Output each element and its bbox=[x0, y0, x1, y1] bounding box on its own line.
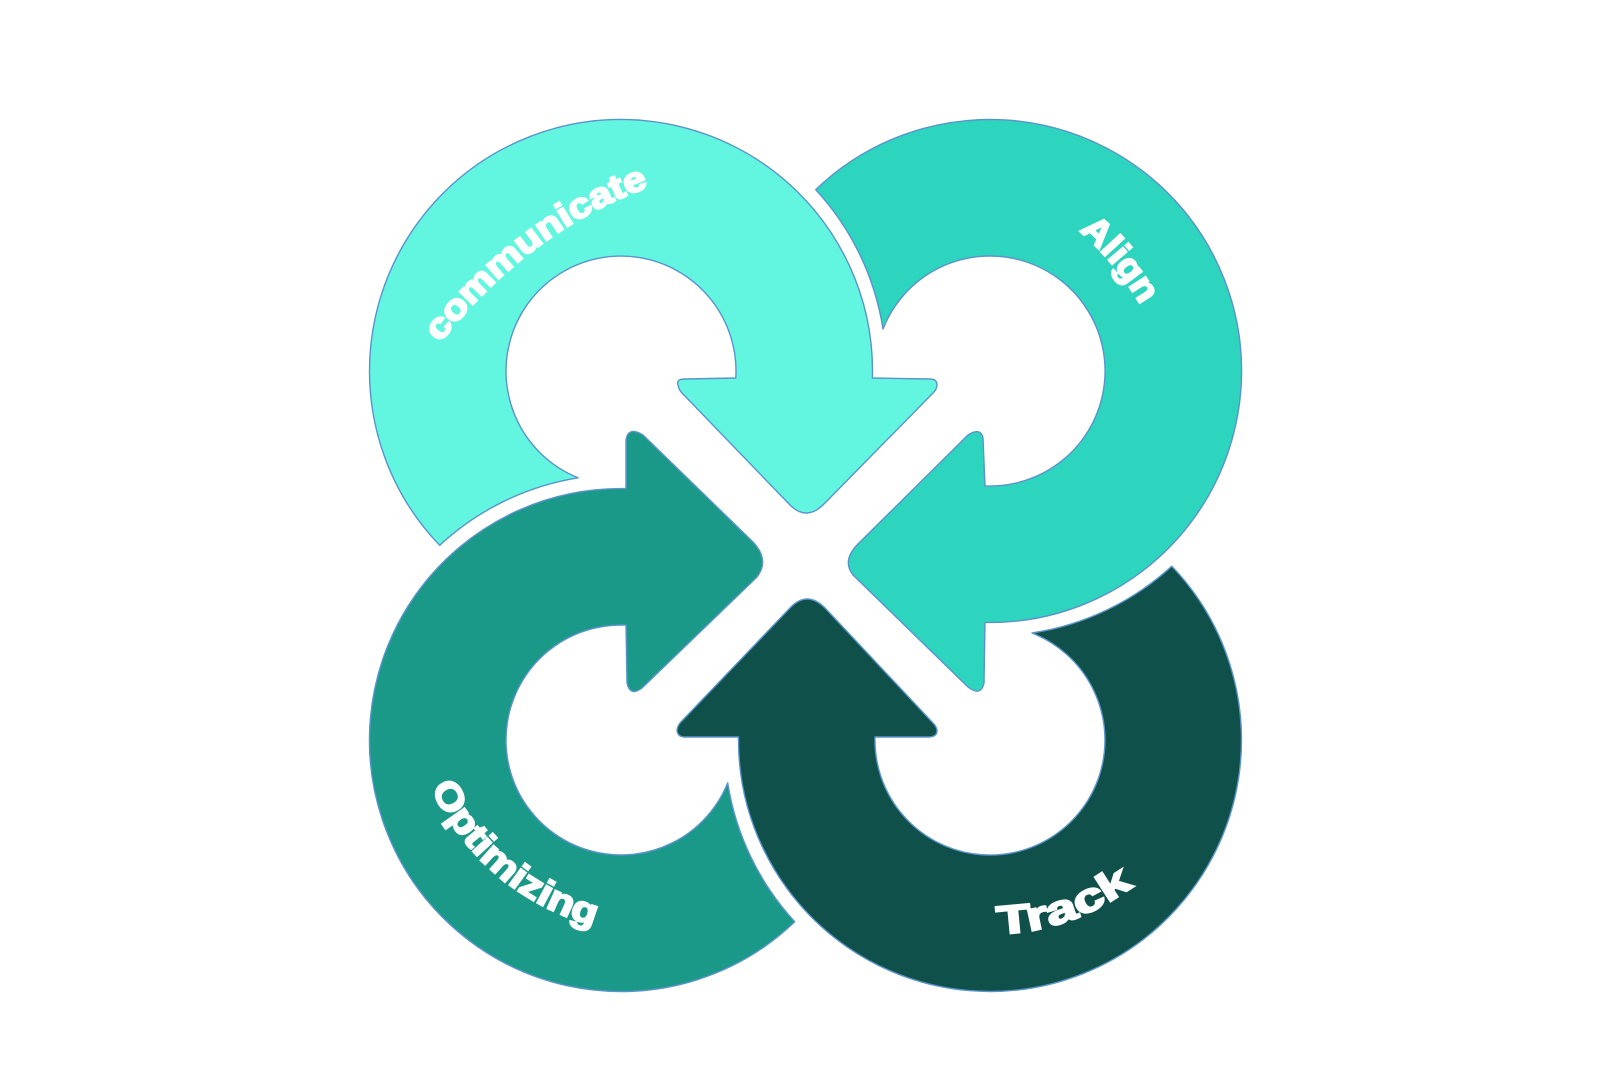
arrow: communicate bbox=[368, 118, 938, 546]
arrow: optimizing bbox=[368, 430, 796, 992]
arrow: track bbox=[676, 566, 1242, 992]
label: track: Track bbox=[994, 866, 1136, 934]
label: optimizing: Optimizing bbox=[434, 780, 598, 932]
arrow: align bbox=[815, 118, 1242, 692]
label: align: Align bbox=[1078, 218, 1155, 304]
label: communicate: communicate bbox=[429, 172, 647, 340]
